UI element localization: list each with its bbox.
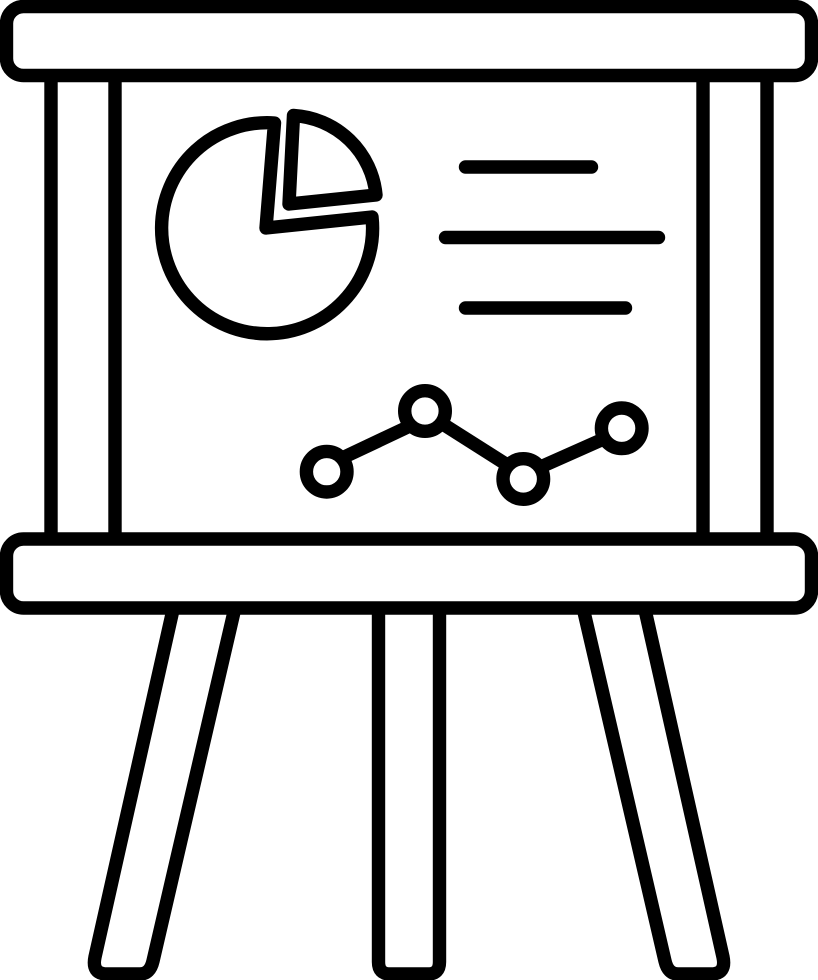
easel leg: center [378,612,440,974]
pie detached slice [289,116,376,204]
text lines [446,167,658,308]
bottom bar [6,539,812,608]
chart connecting lines [340,421,608,469]
easel leg: right [584,612,724,974]
board posts and panel edges [51,78,767,536]
line chart [306,391,642,499]
pie main body [162,123,373,334]
top bar [6,6,812,76]
easel leg: left [94,612,234,974]
chart data points [306,391,642,499]
pie chart [162,116,376,334]
